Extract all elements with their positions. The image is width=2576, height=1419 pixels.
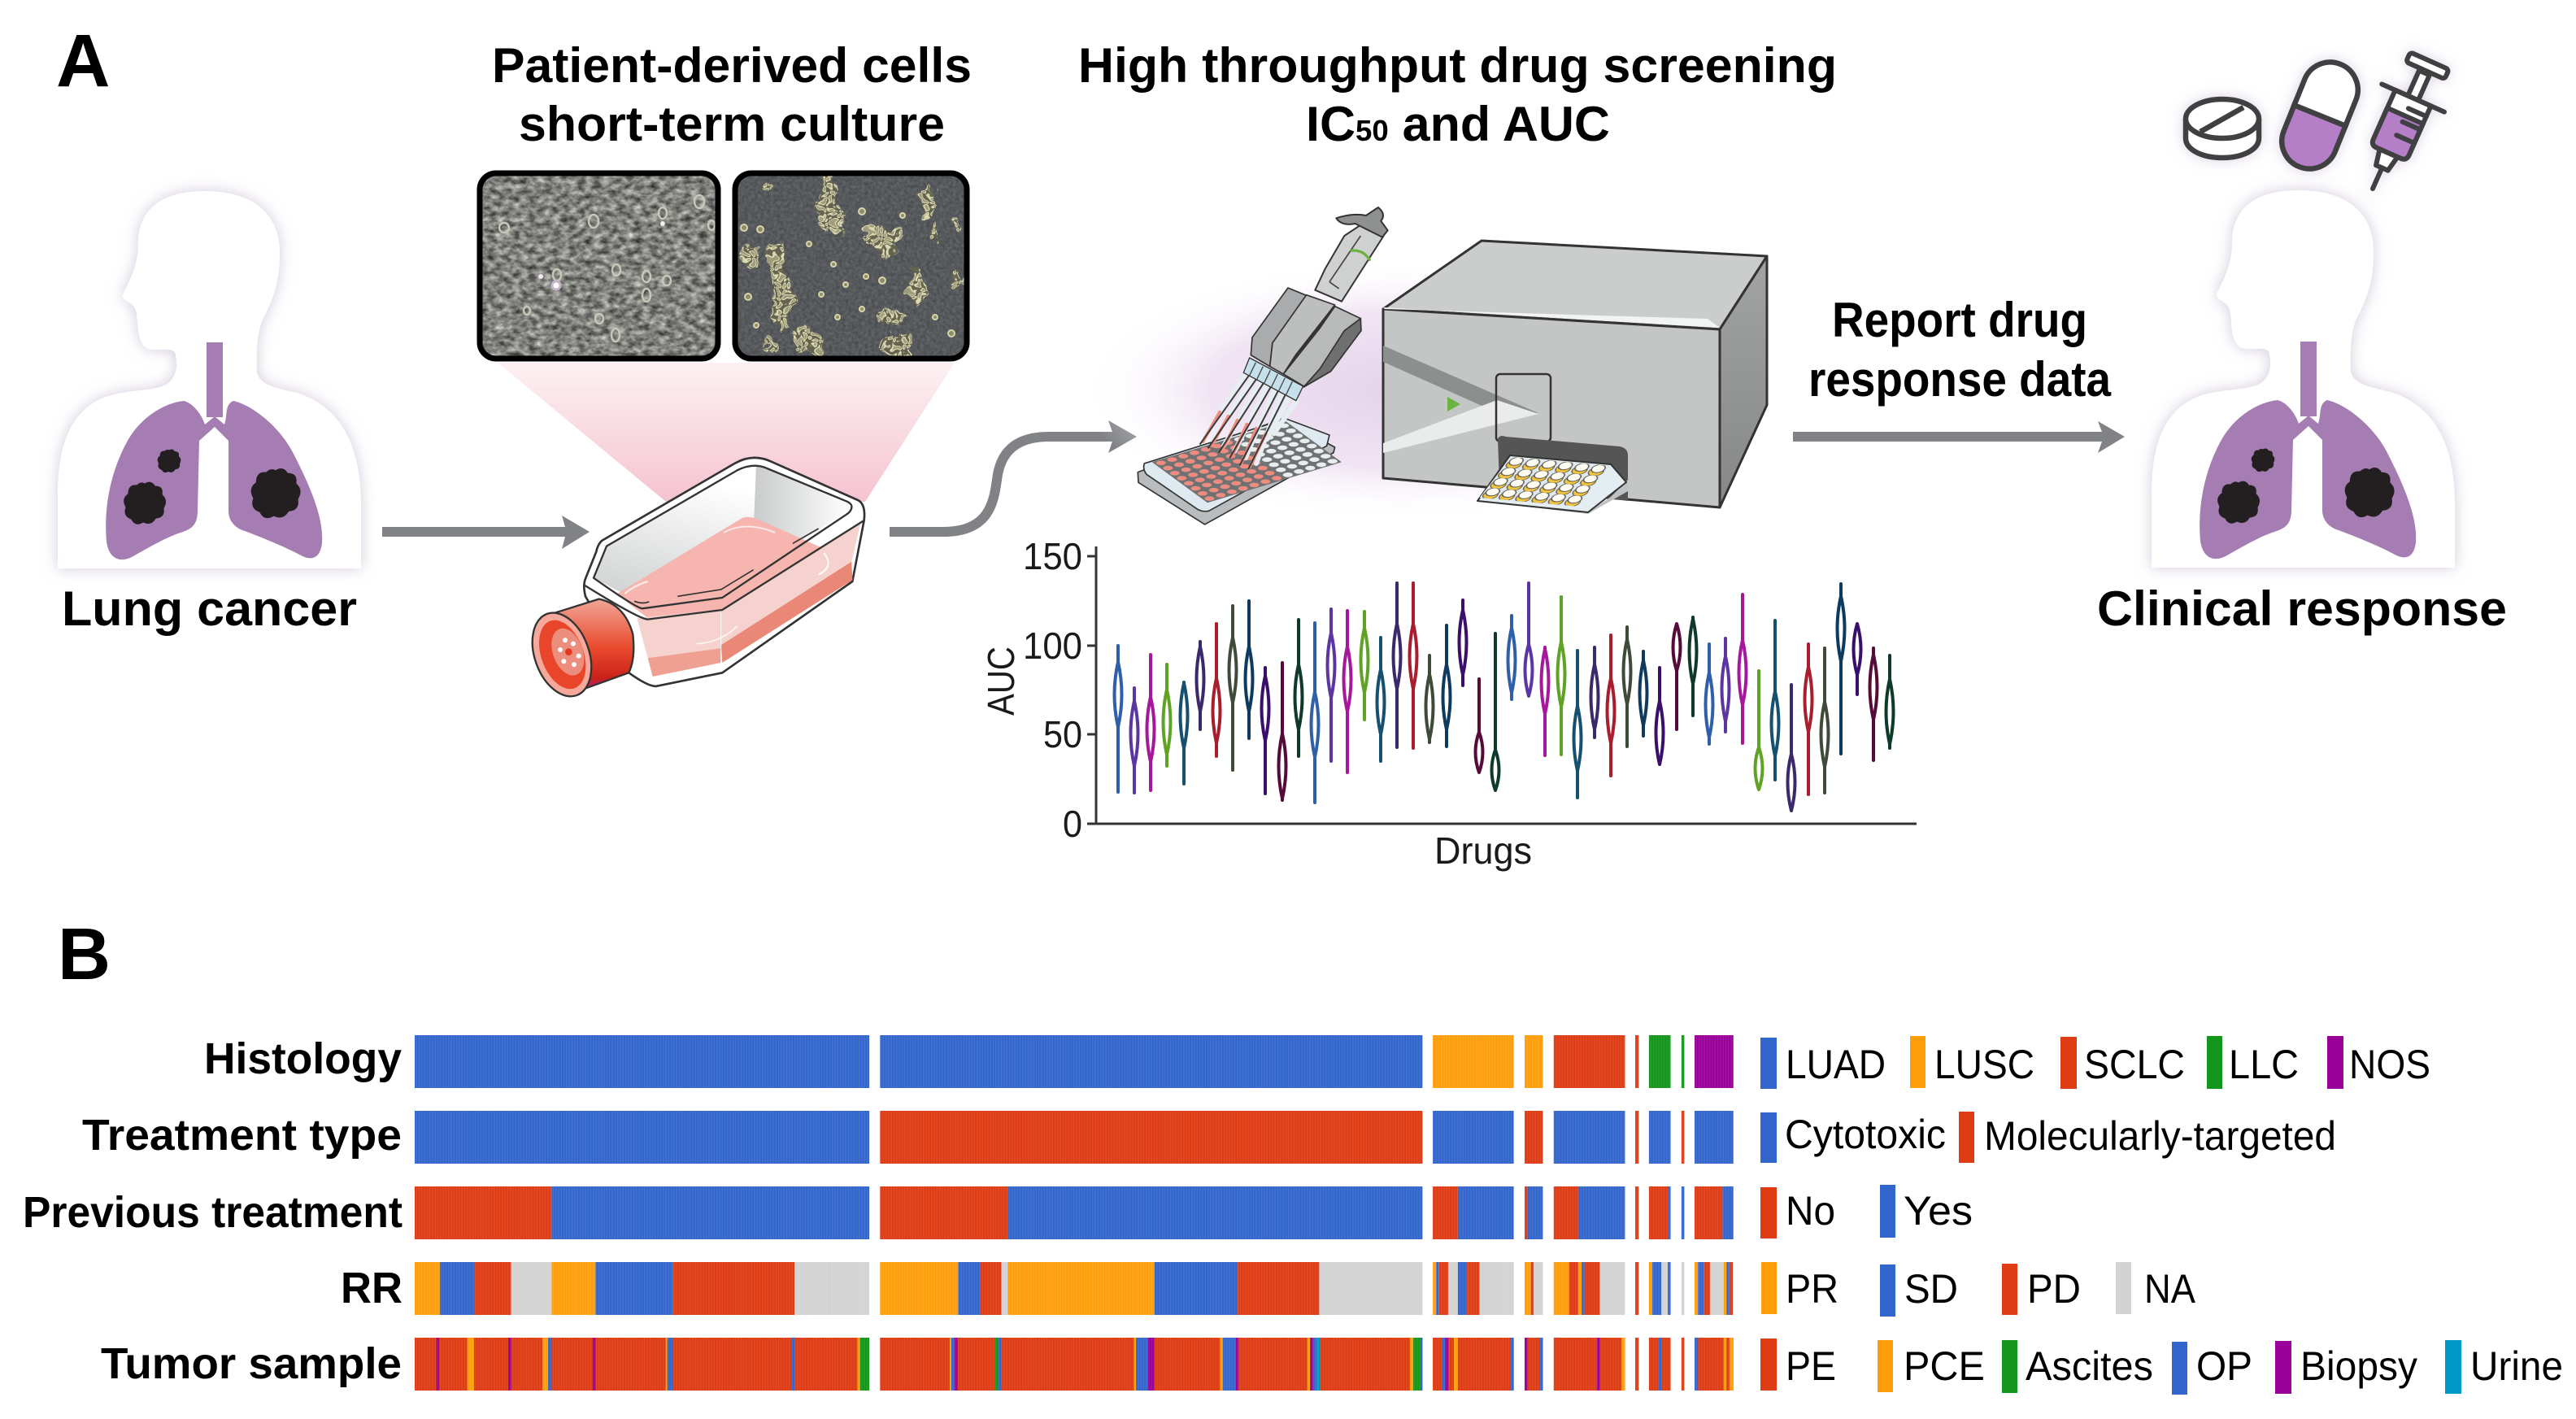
bars: Histology [415, 1035, 1734, 1088]
heading: patient-derived cells: short-term culture [519, 97, 945, 151]
legend: RR: NA [2144, 1266, 2196, 1312]
label: Report drug response data [1808, 293, 2112, 407]
heading: high throughput drug screening: IC50 and AUC [1306, 97, 1610, 151]
bars: RR [415, 1262, 1733, 1315]
legend: Histology [1760, 1036, 2430, 1089]
track: RR [341, 1262, 1733, 1315]
lavender glow behind instruments [1081, 260, 1716, 520]
legend: Tumor sample: Biopsy [2300, 1343, 2417, 1389]
label: Lung cancer: Lung cancer [62, 581, 357, 636]
panel letter B: B [58, 914, 111, 995]
legend: RR [1761, 1262, 2196, 1317]
legend: RR: PR [1786, 1266, 1838, 1312]
arrow: patient to flask [382, 516, 590, 549]
y tick labels [1023, 535, 1082, 845]
heading: patient-derived cells [492, 38, 972, 151]
panel B: patient annotation tracks [23, 914, 2563, 1395]
bars: Previous treatment [415, 1186, 1734, 1239]
legend: Tumor sample [1760, 1338, 2563, 1395]
legend: Treatment type: Molecularly-targeted [1984, 1113, 2336, 1159]
panel A: drug screening workflow [56, 20, 2507, 872]
legend: Treatment type: Cytotoxic [1785, 1112, 1946, 1157]
icon: patient with lung cancer [58, 191, 361, 568]
legend: Tumor sample: Ascites [2026, 1343, 2153, 1389]
legend: Previous treatment: No [1786, 1188, 1835, 1234]
magnification cone [498, 363, 955, 502]
legend: Treatment type [1760, 1112, 2336, 1163]
bars: Tumor sample [415, 1338, 1734, 1391]
micrograph: suspension cell clusters [735, 173, 967, 359]
label: Treatment type: Treatment type [82, 1111, 402, 1160]
icon: culture flask [521, 458, 864, 704]
heading: high throughput drug screening [1078, 38, 1837, 151]
y tick labels: 100 [1023, 625, 1082, 667]
heading: high throughput drug screening: High throughput drug screening [1078, 38, 1837, 93]
icon: syringe [2342, 47, 2461, 202]
legend: Histology: NOS [2349, 1042, 2430, 1087]
arrow: flask to drug screening [890, 420, 1137, 532]
label: Histology: Histology [204, 1034, 402, 1083]
legend: Tumor sample: Urine [2470, 1343, 2563, 1389]
icon: capsule [2274, 54, 2366, 177]
label: Clinical response: Clinical response [2097, 581, 2507, 636]
label: Tumor sample: Tumor sample [101, 1339, 402, 1388]
legend: Tumor sample: PE [1786, 1343, 1836, 1389]
legend: Histology: LUAD [1786, 1042, 1886, 1087]
y tick labels: 150 [1023, 535, 1082, 577]
legend: Histology: LLC [2229, 1042, 2299, 1087]
legend: Tumor sample: OP [2196, 1343, 2252, 1389]
legend: Tumor sample: PCE [1904, 1343, 1985, 1389]
track: Previous treatment [23, 1186, 1734, 1239]
legend: Previous treatment: Yes [1904, 1188, 1973, 1234]
legend: Previous treatment [1760, 1185, 1973, 1238]
icon: multichannel pipette over 96-well plate [1138, 207, 1388, 525]
track: Histology [204, 1034, 1734, 1088]
panel letter A: A [56, 20, 110, 102]
label: RR: RR [341, 1264, 402, 1312]
icon: patient clinical response [2152, 190, 2455, 568]
legend: Histology: SCLC [2084, 1042, 2185, 1087]
micrograph: adherent cells [480, 173, 718, 359]
icon: tablet [2186, 99, 2259, 158]
bars: Treatment type [415, 1111, 1734, 1164]
arrow: report to clinic [1793, 421, 2125, 453]
legend: Histology: LUSC [1934, 1042, 2034, 1087]
heading: patient-derived cells: Patient-derived cells [492, 38, 972, 93]
violins [1114, 583, 1893, 811]
track: Tumor sample [101, 1338, 1734, 1391]
x axis title: Drugs [1434, 829, 1532, 872]
y axis title: AUC [980, 646, 1022, 716]
y tick labels: 50 [1043, 713, 1082, 755]
chart: AUC violin plot [980, 535, 1917, 872]
y tick labels: 0 [1063, 803, 1082, 845]
icon: plate reader [1383, 241, 1767, 514]
label: Report drug response data: response data [1808, 352, 2112, 407]
icon: treatment pills and syringe [2186, 47, 2461, 202]
label: Previous treatment: Previous treatment [23, 1188, 402, 1237]
legend: RR: SD [1904, 1266, 1958, 1312]
axes [1087, 546, 1917, 824]
legend: RR: PD [2027, 1266, 2081, 1312]
track: Treatment type [82, 1111, 1734, 1164]
label: Report drug response data: Report drug [1832, 293, 2087, 347]
